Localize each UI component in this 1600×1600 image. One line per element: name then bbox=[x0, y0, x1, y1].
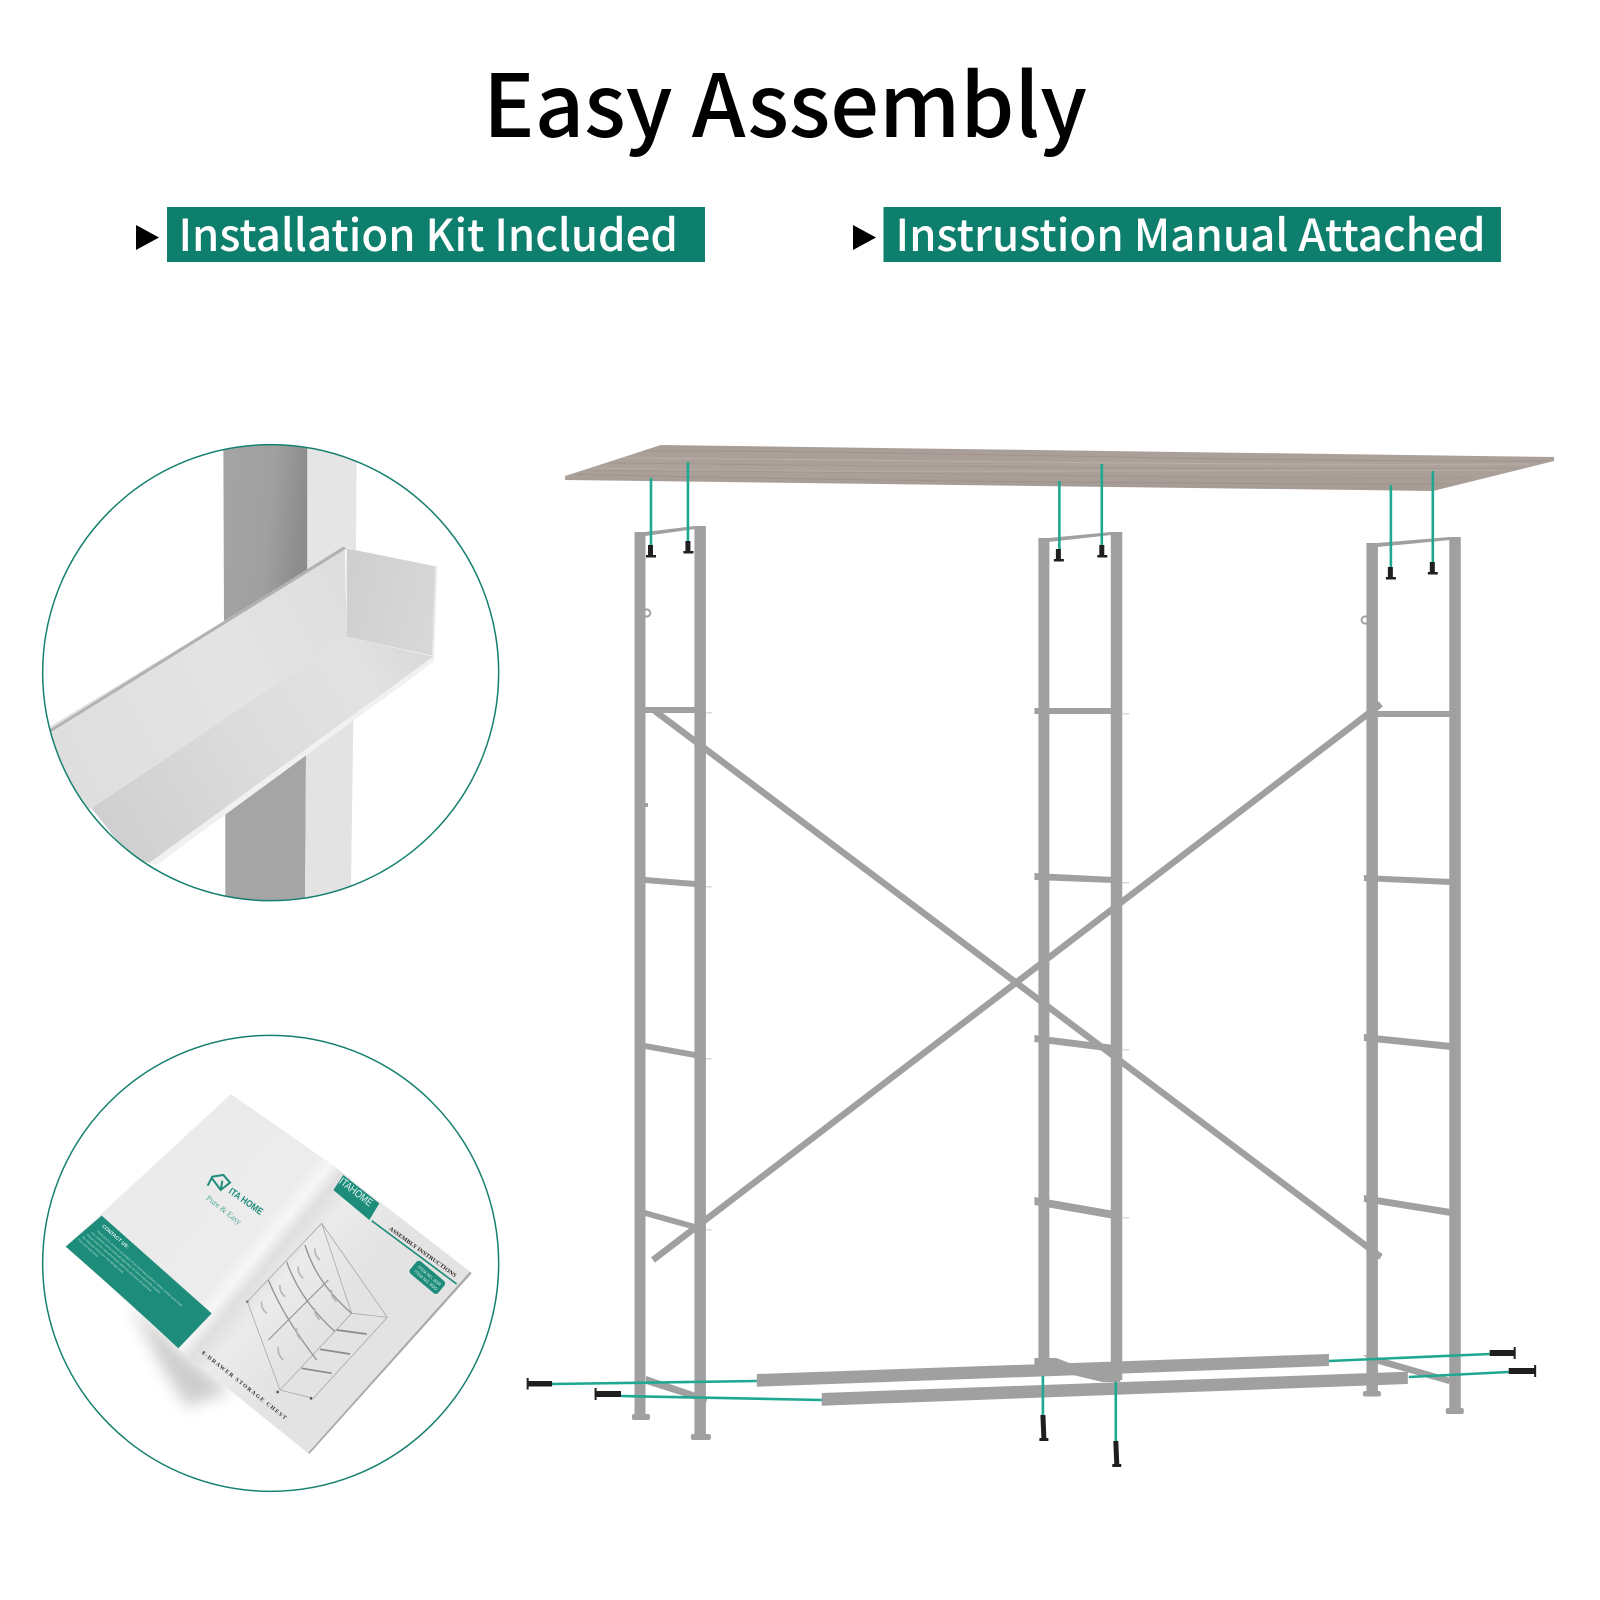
diagram: exploded chest frame bbox=[527, 445, 1554, 1467]
panel: steel angle detail circle bbox=[43, 440, 499, 907]
screws: rail fixings bbox=[527, 1347, 1536, 1467]
connector lines bbox=[552, 462, 1509, 1442]
circle outline bbox=[43, 1035, 499, 1491]
assembly instructions heading: ASSEMBLY INSTRUCTIONS bbox=[387, 1226, 457, 1279]
model badge bbox=[408, 1259, 447, 1295]
book pages and spine bbox=[66, 1094, 470, 1453]
frame: centre upright pair bbox=[1034, 532, 1129, 1380]
banner: installation kit bbox=[167, 207, 705, 262]
upper vertical post bbox=[223, 440, 357, 622]
faint rung stubs bbox=[706, 712, 712, 1230]
banner: manual bbox=[884, 207, 1501, 262]
logo wordmark: ITA HOME bbox=[226, 1186, 265, 1218]
contact heading: CONTACT US: bbox=[100, 1224, 130, 1251]
chest line drawing bbox=[246, 1223, 387, 1400]
manual booklet bbox=[66, 1094, 472, 1454]
wood top board bbox=[565, 445, 1554, 491]
banner text: manual: Instrustion Manual Attached bbox=[896, 200, 1486, 264]
circle outline bbox=[43, 445, 499, 901]
faint rung stubs bbox=[1122, 713, 1129, 1218]
callout: instruction manual attached bbox=[853, 200, 1501, 264]
screws: top fixings bbox=[646, 541, 1438, 580]
panel: instruction manual circle bbox=[43, 1035, 499, 1491]
contact panel bbox=[66, 1216, 212, 1348]
model badge: ITEM NO. 8DG bbox=[413, 1269, 439, 1292]
title: Easy Assembly bbox=[483, 37, 1087, 163]
icon: arrow marker bbox=[136, 225, 159, 250]
frame: left upright pair bbox=[632, 526, 712, 1440]
lower vertical post bbox=[225, 720, 353, 907]
logo tagline: Pure & Easy bbox=[204, 1193, 244, 1227]
book shadow bbox=[130, 1303, 230, 1407]
model badge: ITEM NO. 8DR bbox=[417, 1265, 442, 1287]
callout: installation kit included bbox=[136, 200, 705, 264]
contact details: Thank you for choosing our product. If you have any questions, please contact us by email. bbox=[96, 1229, 184, 1308]
icon: arrow marker bbox=[853, 225, 876, 250]
brand tab: ITAHOME bbox=[336, 1176, 375, 1209]
frame: right upright pair bbox=[1362, 537, 1464, 1414]
logo: house icon bbox=[208, 1175, 230, 1190]
banner text: installation kit: Installation Kit Included bbox=[178, 200, 678, 264]
heading rule bbox=[372, 1221, 457, 1284]
contact details: Pure and easy living. bbox=[77, 1238, 100, 1258]
frame: cross braces bbox=[653, 704, 1381, 1260]
contact details bbox=[77, 1224, 184, 1322]
product name: 8-DRAWER STORAGE CHEST bbox=[200, 1350, 287, 1421]
contact details: Please keep this manual for future reference and check all parts first. bbox=[86, 1233, 153, 1293]
contact details: Our customer service team will reply within 24 hours and provide support. bbox=[90, 1231, 162, 1295]
contact details: We hope you enjoy your new storage chest. bbox=[81, 1235, 125, 1275]
frame: lower rails bbox=[757, 1354, 1408, 1406]
angle bracket bbox=[43, 547, 437, 865]
